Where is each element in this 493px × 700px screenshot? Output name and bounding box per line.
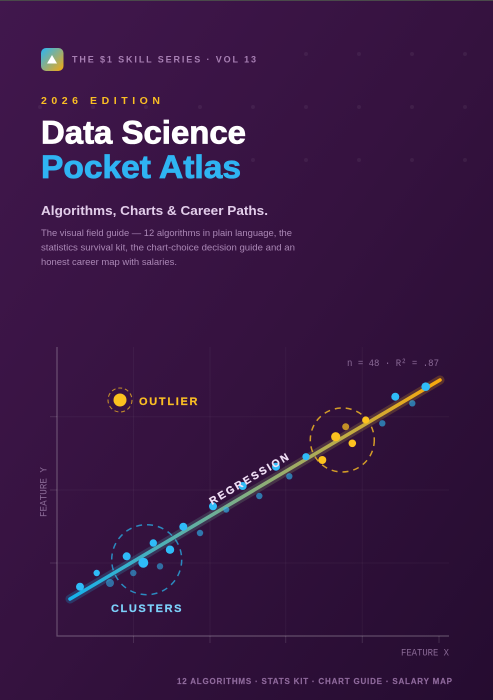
label: regression: REGRESSION — [207, 451, 291, 508]
regression line — [70, 380, 440, 599]
blue data points — [76, 382, 430, 591]
footer strip: 12 ALGORITHMS · STATS KIT · CHART GUIDE · SALARY MAP — [177, 677, 453, 686]
label: outlier: OUTLIER — [139, 396, 198, 408]
cluster ring: gold — [310, 408, 374, 472]
description: statistics survival kit, the chart-choice decision guide and an — [41, 242, 295, 254]
outlier marker — [108, 388, 132, 412]
axis label: feature y: FEATURE Y — [38, 466, 50, 517]
title: Data Science — [41, 114, 246, 150]
axis label: feature x: FEATURE X — [401, 648, 450, 660]
chart gridlines and axes — [50, 347, 449, 643]
edition label: 2026 EDITION — [41, 95, 160, 107]
description: The visual field guide — 12 algorithms in plain language, the — [41, 228, 292, 239]
cluster ring: blue — [112, 525, 182, 595]
description: honest career map with salaries. — [41, 257, 177, 268]
icon: series logo — [41, 48, 64, 71]
title: Pocket Atlas — [41, 149, 241, 185]
stats note: n = 48 · R² = .87 — [347, 359, 439, 370]
series label: THE $1 SKILL SERIES · VOL 13 — [72, 54, 256, 64]
title — [41, 114, 246, 185]
label: clusters: CLUSTERS — [111, 603, 182, 615]
gold data points — [318, 416, 369, 464]
subtitle: Algorithms, Charts & Career Paths. — [41, 203, 268, 218]
description — [41, 228, 295, 268]
scatter chart — [38, 347, 450, 660]
